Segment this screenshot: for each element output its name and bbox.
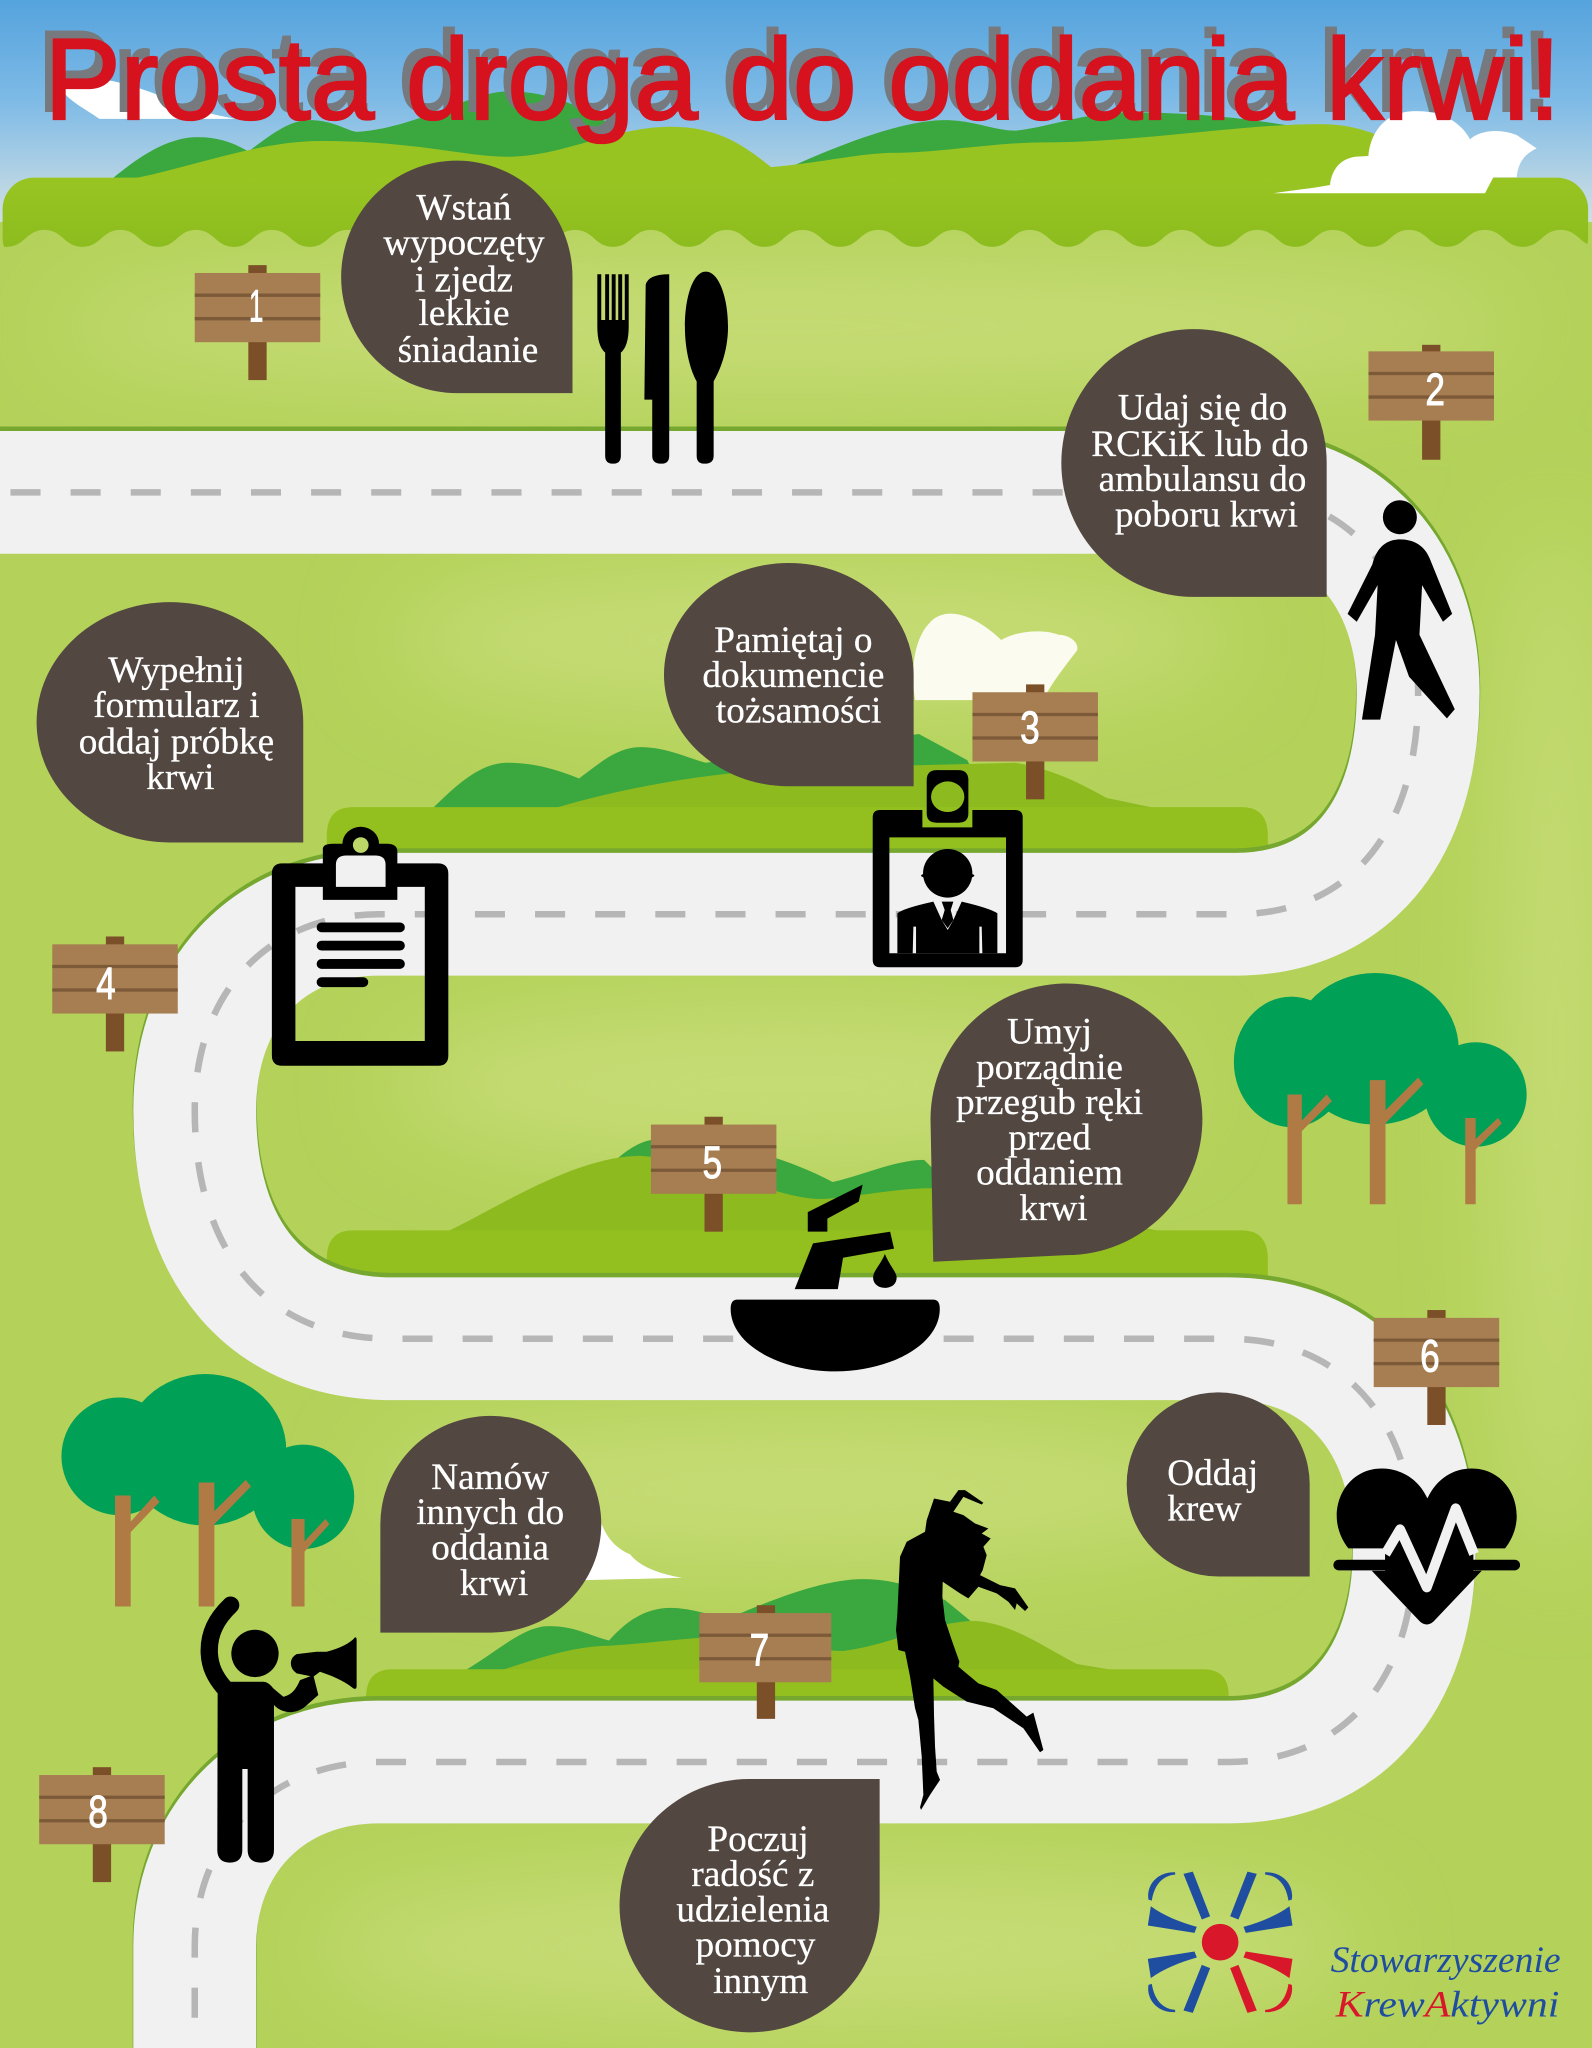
bubble: step 7: radość z <box>691 1854 814 1895</box>
logo: Stowarzyszenie KrewAktywni: Krew Aktywni <box>1335 1984 1559 2025</box>
cloud: top right <box>1273 111 1537 193</box>
trees: right <box>1234 973 1527 1204</box>
bubble: step 1: wypoczęty <box>383 223 545 264</box>
title: Prosta droga do oddania krwi! <box>37 8 1553 136</box>
bubble: step 6: krew <box>1167 1488 1242 1529</box>
badge portrait <box>897 849 997 953</box>
icon: heart with pulse <box>1337 1468 1517 1624</box>
bubble: step 5: przed <box>1008 1117 1091 1158</box>
sign 8: 8 <box>88 1786 108 1837</box>
bubble: step 6: Oddaj <box>1167 1453 1258 1494</box>
bubble: step 3: tożsamości <box>716 690 881 731</box>
bubble: step 5: krwi <box>1019 1188 1088 1229</box>
bubble: step 5: przegub ręki <box>956 1082 1143 1123</box>
icon: clipboard <box>272 827 448 1066</box>
grass band with wavy edge <box>2 178 1588 247</box>
sign 2: 2 <box>1425 364 1445 415</box>
bubble: step 3 <box>664 563 914 786</box>
sign 5 <box>651 1117 776 1232</box>
bubble: step 2 <box>1061 329 1327 597</box>
icon: jumping woman <box>896 1490 1043 1810</box>
icon: person with megaphone <box>209 1605 357 1863</box>
sign 3 <box>972 684 1098 799</box>
title: Prosta droga do oddania krwi! <box>44 16 1561 144</box>
bubble: step 4: krwi <box>146 757 215 798</box>
sign 1 <box>195 265 320 380</box>
bubble: step 1 <box>341 161 572 393</box>
sign 5: 5 <box>703 1137 722 1188</box>
bubble: step 2: Udaj się do <box>1118 387 1287 428</box>
bubble: step 2: poboru krwi <box>1115 494 1298 535</box>
sign 4: 4 <box>96 958 116 1009</box>
hills behind step 5 <box>327 1139 1268 1293</box>
bubble: step 8: oddania <box>431 1528 550 1569</box>
bubble: step 7: udzielenia <box>676 1889 830 1930</box>
bubble: step 7: innym <box>713 1961 808 2002</box>
logo: Stowarzyszenie KrewAktywni <box>1148 1872 1561 2025</box>
winding road <box>0 488 1418 2048</box>
bubble: step 3: Pamiętaj o <box>714 620 872 661</box>
logo mark <box>1148 1872 1292 2013</box>
bubble: step 4: oddaj próbkę <box>79 722 274 763</box>
sign 6: 6 <box>1420 1330 1440 1381</box>
bubble: step 4: formularz i <box>93 685 260 726</box>
icon: walking person <box>1348 500 1455 720</box>
sign 2 <box>1368 345 1494 460</box>
cloud: top left <box>63 80 235 119</box>
bubble: step 8: Namów <box>431 1457 549 1498</box>
bubble: step 5: oddaniem <box>976 1153 1123 1194</box>
bubble: step 8 <box>380 1416 601 1633</box>
icon: tap and sink <box>731 1185 940 1371</box>
sign 4 <box>52 936 178 1051</box>
icon: id badge <box>873 770 1023 967</box>
sign 7 <box>699 1605 831 1719</box>
hills behind step 3 <box>327 734 1268 869</box>
sign 1: 1 <box>249 280 263 331</box>
hills behind step 7 <box>366 1579 1229 1724</box>
bubble: step 7: pomocy <box>695 1925 816 1966</box>
cloud: middle <box>913 614 1077 700</box>
bubble: step 8: innych do <box>416 1492 564 1533</box>
bubble: step 7 <box>620 1779 880 2032</box>
bubble: step 1: lekkie <box>419 293 509 334</box>
sign 7: 7 <box>750 1624 769 1675</box>
road centre dashes <box>10 492 1418 2038</box>
bubble: step 2: ambulansu do <box>1099 459 1306 500</box>
bubble: step 2: RCKiK lub do <box>1091 424 1308 465</box>
trees: left <box>61 1374 354 1607</box>
clipboard text lines <box>322 927 400 982</box>
bubble: step 6 <box>1127 1392 1310 1576</box>
sign 3: 3 <box>1020 702 1040 753</box>
bubble: step 4: Wypełnij <box>108 650 245 691</box>
bubble: step 3: dokumencie <box>702 655 884 696</box>
distant hills: top <box>105 91 1422 183</box>
logo wordmark: Stowarzyszenie <box>1331 1939 1561 1980</box>
bubble: step 5 <box>931 984 1202 1262</box>
sky <box>0 0 1592 248</box>
bubble: step 5: porządnie <box>976 1047 1123 1088</box>
sign 6 <box>1374 1310 1499 1425</box>
bubble: step 5: Umyj <box>1007 1012 1092 1053</box>
sign 8 <box>39 1767 165 1882</box>
bubble: step 7: Poczuj <box>707 1819 809 1860</box>
bubble: step 1: Wstań <box>416 187 512 228</box>
cloud: lower <box>575 1502 682 1580</box>
icon: cutlery <box>597 272 728 464</box>
bubble: step 1: i zjedz <box>415 259 513 300</box>
bubble: step 4 <box>37 602 303 842</box>
bubble: step 1: śniadanie <box>398 330 538 371</box>
bubble: step 8: krwi <box>460 1563 528 1604</box>
